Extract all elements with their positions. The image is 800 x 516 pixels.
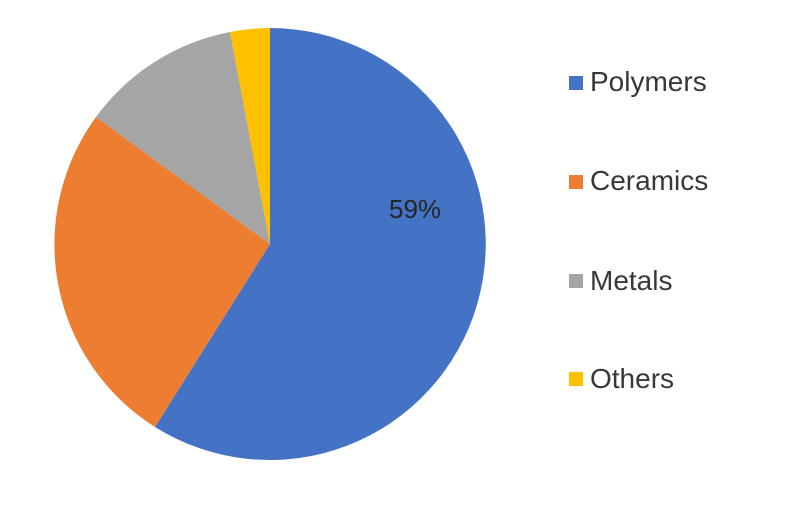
legend item: Metals: Metals [590, 265, 672, 296]
slice: Others [230, 28, 270, 244]
legend [569, 66, 708, 394]
data label: 59%: 59% [389, 194, 441, 224]
legend item: Ceramics: Ceramics [590, 165, 708, 196]
slice: Polymers 59% [155, 28, 486, 460]
legend item: Others: Others [590, 363, 674, 394]
pie chart [54, 28, 486, 460]
legend item: Polymers: Polymers [590, 66, 707, 97]
slice: Ceramics [54, 117, 270, 427]
slice: Metals [96, 32, 270, 244]
